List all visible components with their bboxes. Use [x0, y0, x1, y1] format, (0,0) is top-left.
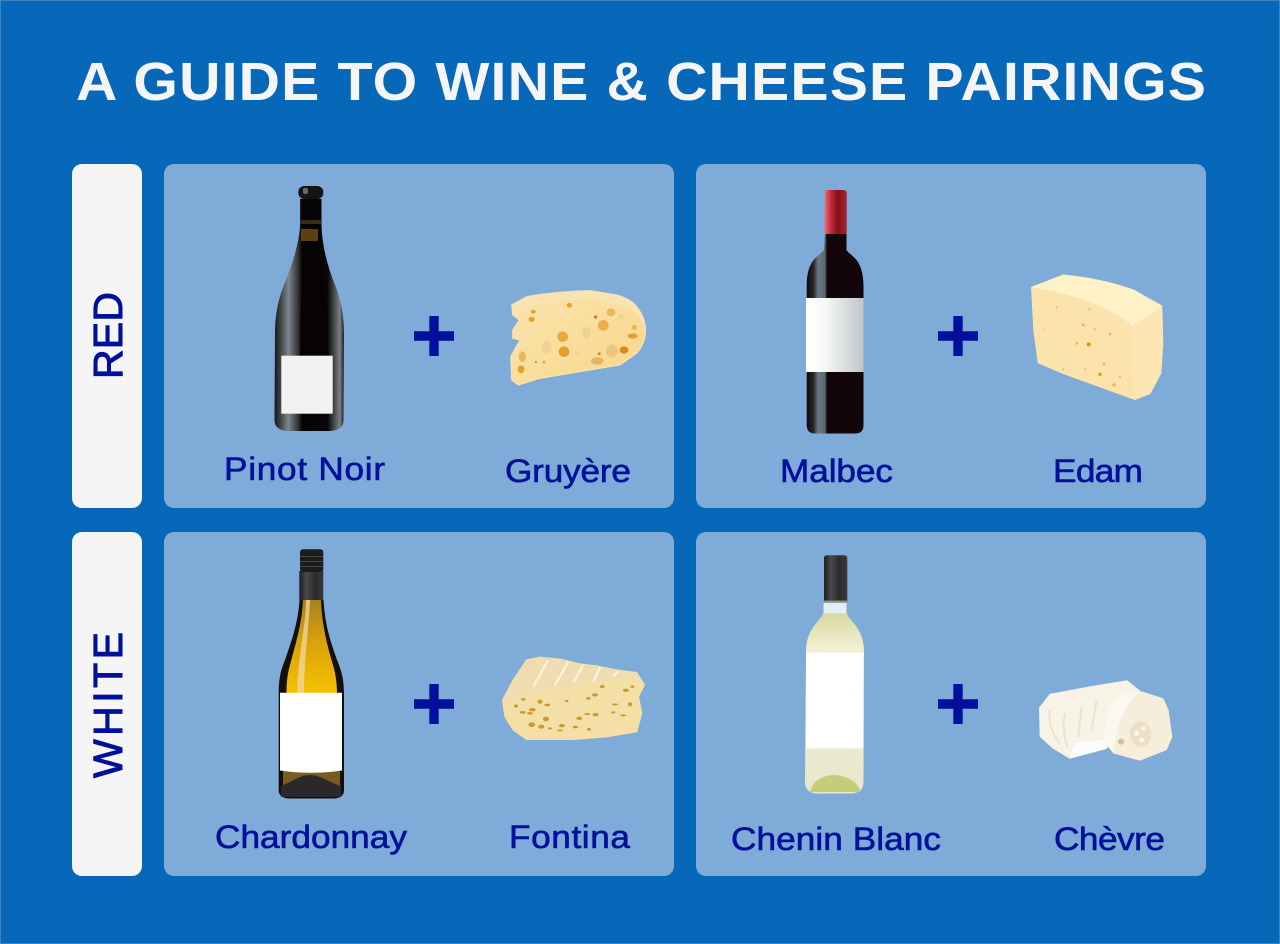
icon: Chenin Blanc bottle: [805, 555, 864, 794]
icon: Edam cheese: [1032, 275, 1163, 399]
panel: Chenin Blanc and Chevre: [696, 532, 1206, 876]
icon: plus: [414, 316, 454, 356]
icon: plus: [414, 684, 454, 724]
icon: plus: [938, 316, 978, 356]
label: Chevre: Chèvre: [1054, 822, 1165, 858]
icon: Chardonnay bottle: [279, 549, 344, 798]
title: A GUIDE TO WINE & CHEESE PAIRINGS: [76, 51, 1206, 112]
tab: white: [72, 532, 142, 876]
label: Chenin Blanc: Chenin Blanc: [731, 822, 941, 858]
icon: Fontina cheese: [503, 657, 644, 739]
icon: plus: [938, 684, 978, 724]
tab: white: WHITE: [85, 632, 131, 778]
label: Gruyere: Gruyère: [505, 454, 631, 490]
icon: Gruyere cheese: [511, 291, 646, 385]
label: Malbec: Malbec: [780, 454, 893, 490]
panel: Pinot Noir and Gruyere: [164, 164, 674, 508]
icon: Chevre cheese: [1041, 682, 1171, 759]
label: Pinot Noir: Pinot Noir: [224, 452, 385, 488]
panel: Chardonnay and Fontina: [164, 532, 674, 876]
panel: Malbec and Edam: [696, 164, 1206, 508]
icon: Pinot Noir bottle: [274, 186, 344, 431]
label: Chardonnay: Chardonnay: [215, 820, 407, 856]
icon: Malbec bottle: [806, 190, 864, 434]
tab: red: [72, 164, 142, 508]
tab: red: RED: [85, 292, 131, 379]
label: Edam: Edam: [1053, 454, 1143, 490]
label: Fontina: Fontina: [509, 820, 630, 856]
